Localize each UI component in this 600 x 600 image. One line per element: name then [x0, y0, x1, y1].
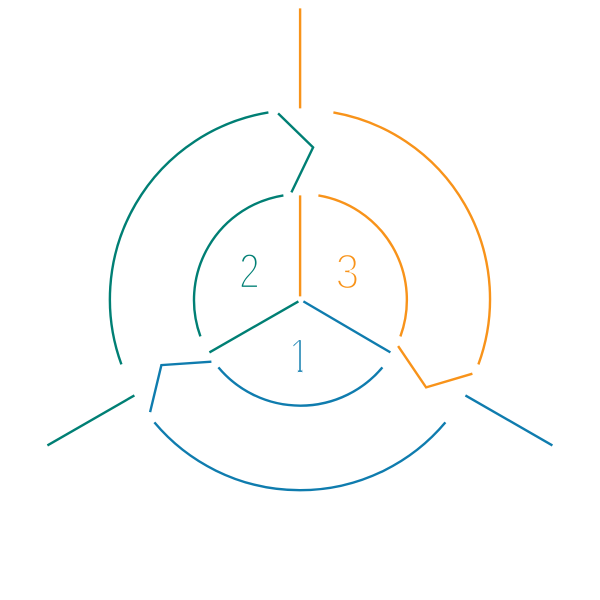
teal divider outer [47, 395, 134, 445]
teal divider inner [209, 301, 298, 352]
blue divider inner [303, 301, 390, 352]
segment 3: orange cycle [300, 8, 490, 387]
orange outer arc [333, 112, 490, 364]
blue divider outer [465, 395, 552, 445]
orange divider outer [299, 8, 301, 108]
orange divider inner [299, 195, 301, 296]
diagram: three interlocking cycles [46, 8, 553, 492]
segment 1: blue cycle [150, 301, 552, 490]
blue connector arrow [150, 362, 211, 412]
blue inner arc [218, 367, 382, 406]
number 1: 1 [289, 330, 310, 384]
blue outer arc [154, 422, 445, 490]
number 2: 2 [239, 245, 260, 299]
orange connector arrow [398, 346, 472, 387]
teal outer arc [110, 112, 268, 364]
teal connector arrow [278, 113, 313, 192]
orange inner arc [318, 195, 407, 336]
segment 2: teal cycle [47, 112, 313, 445]
number 3: 3 [335, 244, 359, 299]
teal inner arc [194, 195, 283, 336]
